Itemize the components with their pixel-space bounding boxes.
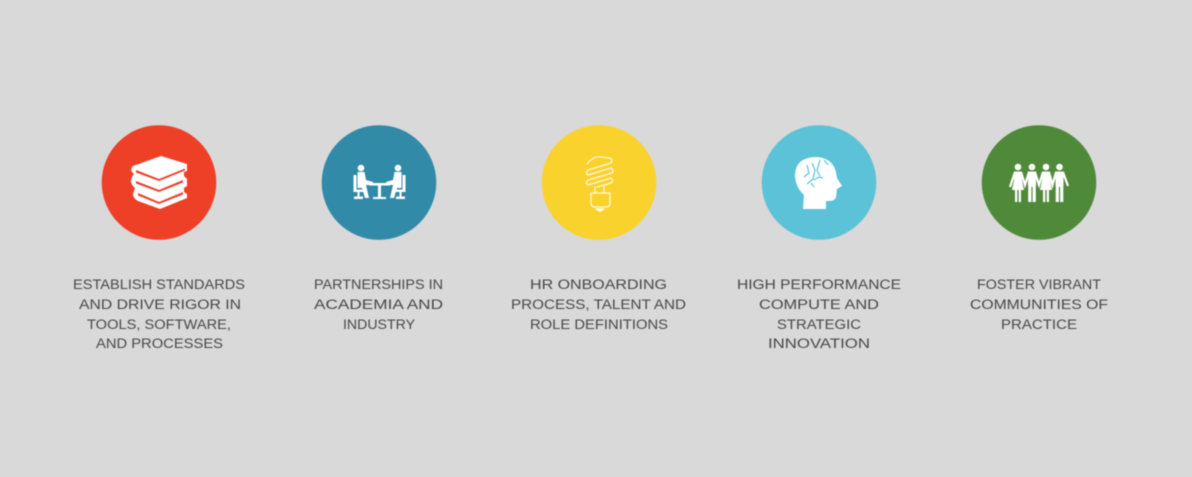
label: partnerships: PARTNERSHIPS IN — [314, 277, 443, 292]
circle: green — [982, 125, 1096, 240]
item: standards — [73, 125, 245, 351]
label: partnerships: INDUSTRY — [343, 317, 415, 332]
label: compute: COMPUTE AND — [759, 297, 879, 312]
label: onboarding: PROCESS, TALENT AND — [511, 297, 686, 312]
label: partnerships — [314, 277, 443, 332]
item: partnerships — [314, 125, 443, 332]
label: communities: PRACTICE — [1001, 317, 1077, 332]
label: communities — [970, 277, 1108, 332]
label: communities: COMMUNITIES OF — [970, 297, 1108, 312]
label: communities: FOSTER VIBRANT — [977, 277, 1101, 292]
icon: stack of books — [131, 156, 187, 209]
label: compute: HIGH PERFORMANCE — [737, 277, 901, 292]
label: compute: INNOVATION — [768, 336, 870, 351]
circle: teal blue — [322, 125, 436, 240]
item: onboarding — [511, 125, 686, 332]
item: communities — [970, 125, 1108, 332]
icon: two people at a table — [354, 165, 406, 199]
label: standards: ESTABLISH STANDARDS — [73, 277, 245, 292]
circle: red — [102, 125, 216, 240]
item: compute — [737, 125, 901, 351]
icon: head with circuit brain — [795, 157, 842, 209]
label: onboarding: HR ONBOARDING — [530, 277, 667, 292]
label: compute: STRATEGIC — [777, 317, 861, 332]
label: compute — [737, 277, 901, 351]
label: partnerships: ACADEMIA AND — [314, 297, 443, 312]
label: standards: AND PROCESSES — [96, 336, 223, 351]
label: standards — [73, 277, 245, 351]
label: onboarding — [511, 277, 686, 332]
circle: light blue — [762, 125, 876, 240]
label: standards: TOOLS, SOFTWARE, — [87, 317, 231, 332]
label: standards: AND DRIVE RIGOR IN — [79, 297, 241, 312]
circle: yellow — [542, 125, 656, 240]
icon: spiral light bulb — [586, 157, 613, 212]
icon: four people — [1010, 164, 1068, 202]
label: onboarding: ROLE DEFINITIONS — [530, 317, 668, 332]
